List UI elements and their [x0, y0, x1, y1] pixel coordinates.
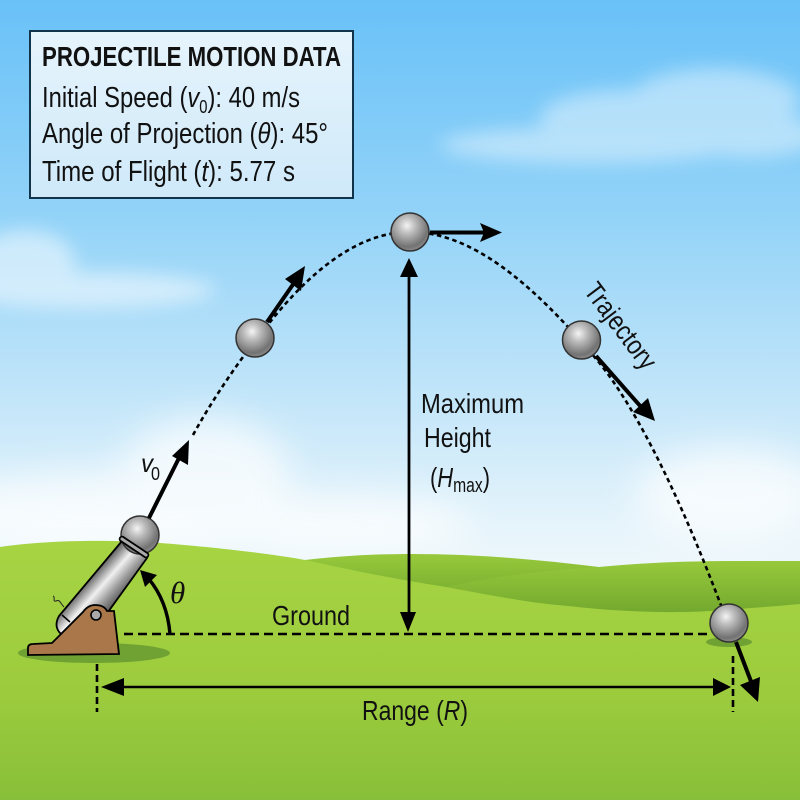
angle arc arrow [148, 578, 170, 634]
apex arrow [430, 230, 484, 234]
arrow 1 [267, 283, 294, 322]
apex ball [391, 213, 429, 251]
max height label: Height [424, 422, 491, 453]
initial speed: ): 40 m/s [208, 82, 300, 114]
barrel rear band [62, 615, 70, 622]
ground shadows [18, 637, 752, 663]
pivot [91, 610, 101, 620]
v0 label: v [141, 448, 155, 478]
time: Time of Flight (t): 5.77 s [42, 156, 295, 188]
trajectory [193, 232, 722, 608]
fuse [53, 596, 64, 607]
ground line [124, 633, 708, 635]
max height label: (H [430, 462, 458, 493]
initial speed: Initial Speed (v [42, 82, 219, 114]
v0 vector [149, 456, 180, 518]
max height label: max [453, 475, 483, 497]
max height arrow [400, 258, 418, 632]
data panel [30, 31, 353, 198]
landing ball [710, 604, 748, 642]
range arrow [101, 678, 731, 696]
projectile motion infographic: 0 [151, 464, 160, 484]
arrow 3 [596, 356, 642, 408]
muzzle ring [122, 539, 146, 555]
max height label: Maximum [421, 388, 524, 419]
back hills [305, 554, 800, 620]
max height label: ) [483, 462, 490, 493]
ball 1 [236, 319, 274, 357]
angle: Angle of Projection (θ): 45° [42, 118, 328, 150]
range markers [97, 656, 733, 712]
initial speed: 0 [199, 97, 208, 117]
landing arrow [736, 642, 752, 684]
panel title: PROJECTILE MOTION DATA [42, 41, 341, 72]
carriage [28, 605, 119, 655]
barrel [57, 541, 147, 636]
foreground ground [0, 541, 800, 800]
cannon [28, 516, 159, 655]
ball 3 [562, 321, 600, 359]
muzzle [121, 516, 159, 554]
range label: Range (R) [362, 695, 468, 726]
trajectory label: Trajectory [578, 277, 663, 376]
label: ground: Ground [272, 600, 350, 631]
max height label [421, 388, 524, 497]
clouds [0, 68, 800, 557]
theta label: θ [170, 575, 185, 610]
